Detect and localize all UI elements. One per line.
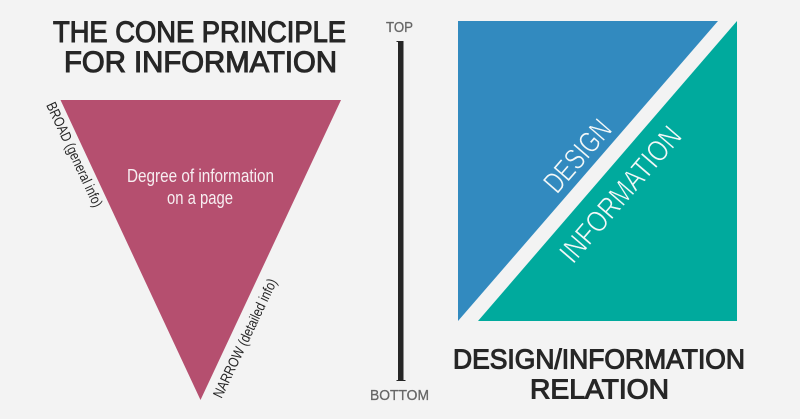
- scale label: bottom: BOTTOM: [370, 387, 429, 404]
- title: design/information relation: [453, 344, 745, 404]
- design triangle: [458, 21, 718, 321]
- information triangle: [478, 21, 737, 321]
- scale label: top: TOP: [386, 19, 413, 36]
- side label: narrow: NARROW (detailed info): [211, 276, 281, 401]
- diagonal label: information: INFORMATION: [553, 120, 689, 270]
- title: the cone principle: THE CONE PRINCIPLE: [53, 16, 346, 49]
- cone triangle: [60, 100, 341, 400]
- diagonal label: design: DESIGN: [537, 113, 619, 200]
- title: the cone principle: FOR INFORMATION: [64, 46, 337, 79]
- cone label: degree of information: on a page: [167, 188, 233, 208]
- title: the cone principle: [53, 16, 346, 79]
- side label: broad: BROAD (general info): [42, 100, 105, 210]
- title: design/information relation: DESIGN/INFORMATION: [453, 344, 745, 374]
- title: design/information relation: RELATION: [530, 374, 669, 404]
- cone label: degree of information: Degree of information: [127, 166, 274, 186]
- vertical scale bar: [396, 41, 406, 381]
- cone label: degree of information: [127, 166, 274, 208]
